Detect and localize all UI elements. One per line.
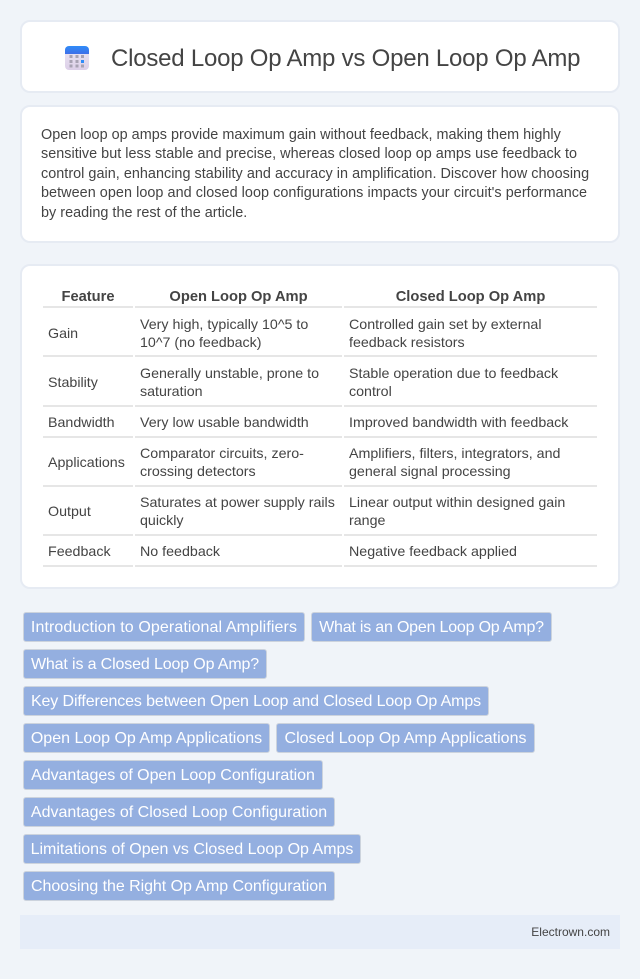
tag: Open Loop Op Amp Applications <box>23 723 270 753</box>
row: Output: quickly <box>140 513 184 529</box>
row: Gain <box>48 317 542 351</box>
row: Feedback <box>48 544 517 560</box>
row: Applications: Applications <box>48 455 125 471</box>
row: Stability <box>48 366 558 400</box>
row: Applications: general signal processing <box>349 464 511 480</box>
table header: Feature: Feature <box>61 289 115 305</box>
panel: title header <box>20 20 620 93</box>
text block: introduction <box>41 127 589 221</box>
row: Output: Output <box>48 504 91 520</box>
tag: Limitations of Open vs Closed Loop Op Amps <box>23 834 361 864</box>
footer: source: Electrown.com <box>531 925 610 939</box>
row: Stability: Stable operation due to feedback <box>349 366 558 382</box>
row: Stability: Stability <box>48 375 98 391</box>
text block: introduction: sensitive but less stable and precise, whereas closed loop op amps use feedback to <box>41 146 577 162</box>
row: Bandwidth: Very low usable bandwidth <box>140 415 309 431</box>
tag: Advantages of Open Loop Configuration: Advantages of Open Loop Configuration <box>31 767 315 784</box>
icon: calendar <box>65 46 89 70</box>
row: Stability: control <box>349 384 392 400</box>
row: Stability: Generally unstable, prone to <box>140 366 319 382</box>
tag: Introduction to Operational Amplifiers: Introduction to Operational Amplifiers <box>31 619 297 636</box>
tag: Closed Loop Op Amp Applications <box>276 723 535 753</box>
row: Applications <box>48 446 560 480</box>
tag: Advantages of Open Loop Configuration <box>23 760 323 790</box>
tag: Advantages of Closed Loop Configuration: Advantages of Closed Loop Configuration <box>31 804 327 821</box>
tag: Choosing the Right Op Amp Configuration <box>23 871 335 901</box>
tag: What is an Open Loop Op Amp? <box>311 612 552 642</box>
row: Output: Saturates at power supply rails <box>140 495 335 511</box>
row: Bandwidth <box>48 415 568 431</box>
title: Closed Loop Op Amp vs Open Loop Op Amp <box>111 45 580 72</box>
tag: What is a Closed Loop Op Amp?: What is a Closed Loop Op Amp? <box>31 656 259 673</box>
row: Feedback: Negative feedback applied <box>349 544 517 560</box>
row: Gain: 10^7 (no feedback) <box>140 335 262 351</box>
row: Output: Linear output within designed gain <box>349 495 565 511</box>
tag: Open Loop Op Amp Applications: Open Loop Op Amp Applications <box>31 730 262 747</box>
row: Gain: Very high, typically 10^5 to <box>140 317 308 333</box>
tag: Advantages of Closed Loop Configuration <box>23 797 335 827</box>
row: Gain: feedback resistors <box>349 335 465 351</box>
tag: What is an Open Loop Op Amp?: What is an Open Loop Op Amp? <box>319 619 544 636</box>
tag: Key Differences <box>23 686 489 716</box>
row: Bandwidth: Improved bandwidth with feedback <box>349 415 568 431</box>
row: Feedback: No feedback <box>140 544 220 560</box>
row: Output <box>48 495 565 529</box>
panel: comparison table <box>20 264 620 589</box>
panel: introduction <box>20 105 620 243</box>
tag: Choosing the Right Op Amp Configuration: Choosing the Right Op Amp Configuration <box>31 878 327 895</box>
tag: Key Differences: Key Differences between Open Loop and Closed Loop Op Amps <box>31 693 481 710</box>
table header: Open Loop Op Amp: Open Loop Op Amp <box>169 289 308 305</box>
tag: Closed Loop Op Amp Applications: Closed Loop Op Amp Applications <box>285 730 526 747</box>
row: Applications: Comparator circuits, zero- <box>140 446 304 462</box>
row: Applications: crossing detectors <box>140 464 256 480</box>
row: Applications: Amplifiers, filters, integrators, and <box>349 446 560 462</box>
text block: introduction: Open loop op amps provide maximum gain without feedback, making them highly <box>41 127 561 143</box>
row: Bandwidth: Bandwidth <box>48 415 115 431</box>
row: Output: range <box>349 513 385 529</box>
row: Gain: Controlled gain set by external <box>349 317 542 333</box>
tag: Limitations of Open vs Closed Loop Op Amps: Limitations of Open vs Closed Loop Op Amps <box>31 841 353 858</box>
text block: introduction: by reading the rest of the article. <box>41 205 247 221</box>
text block: introduction: control gain, enhancing stability and accuracy in amplification. Discover how choosing <box>41 166 589 182</box>
row: Feedback: Feedback <box>48 544 111 560</box>
table header: Closed Loop Op Amp: Closed Loop Op Amp <box>396 289 545 305</box>
text block: introduction: between open loop and closed loop configurations impacts your circuit's performance <box>41 185 587 201</box>
tag: What is a Closed Loop Op Amp? <box>23 649 267 679</box>
row: Gain: Gain <box>48 326 78 342</box>
row: Stability: saturation <box>140 384 203 400</box>
footer bar <box>20 915 620 949</box>
tag: Introduction to Operational Amplifiers <box>23 612 305 642</box>
